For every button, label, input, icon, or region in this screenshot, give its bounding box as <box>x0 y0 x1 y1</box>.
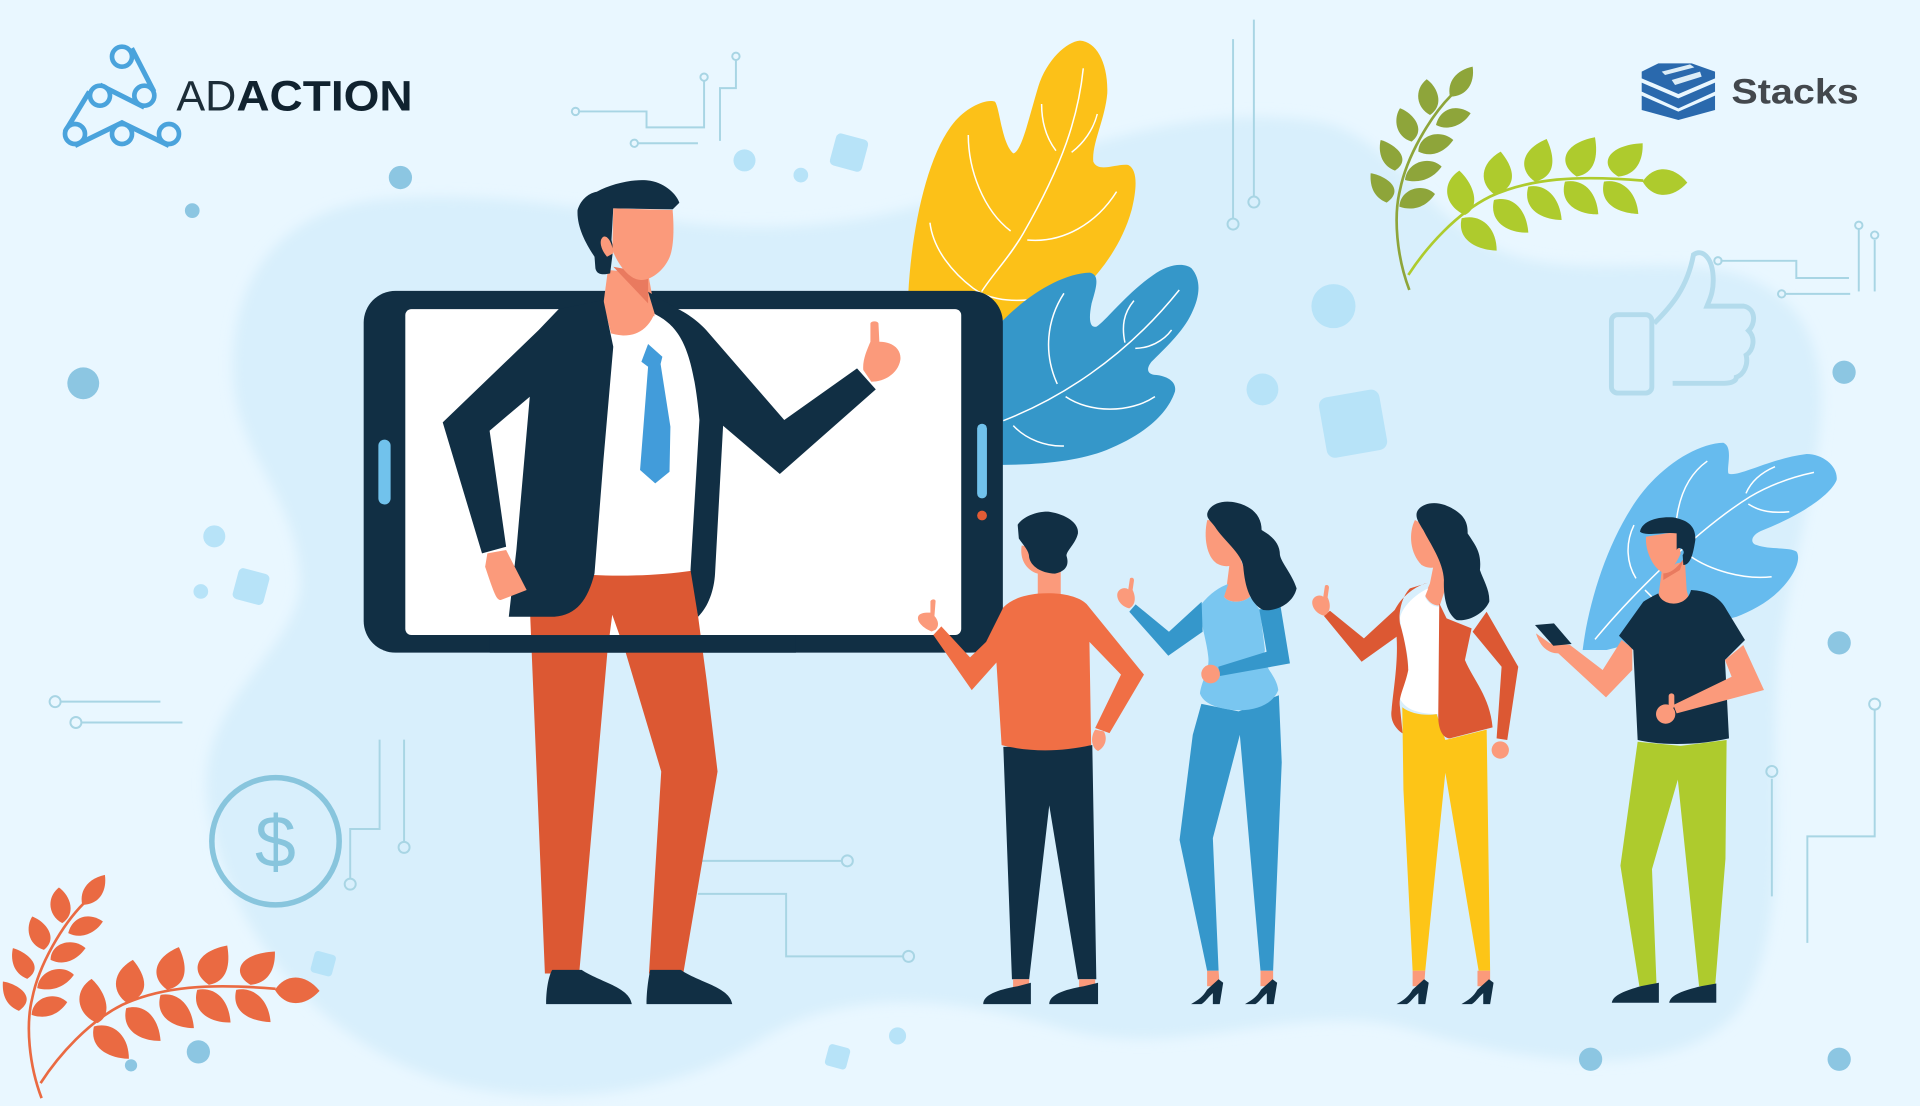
hair <box>577 180 679 274</box>
trousers and shoes <box>1612 740 1727 1003</box>
trousers and shoes <box>1397 707 1494 1004</box>
ear <box>601 236 613 257</box>
leaf: yellow <box>908 41 1136 320</box>
person: man with phone <box>1535 517 1764 1003</box>
tablet left button <box>378 440 391 505</box>
wordmark: AdAction: ACTION <box>236 73 413 120</box>
left hand <box>485 550 527 600</box>
sprig: orange lower <box>41 945 320 1083</box>
icon: thumbs up outline <box>1611 253 1754 393</box>
face <box>612 208 673 280</box>
tablet <box>364 291 1003 653</box>
wordmark: Stacks: Stacks <box>1731 71 1859 111</box>
background blob <box>206 117 1821 1096</box>
icon: Stacks layers <box>1642 63 1715 120</box>
upper body <box>1117 502 1297 710</box>
presenter trousers <box>530 569 718 974</box>
icon: AdAction network <box>65 47 179 146</box>
jacket left <box>443 300 613 617</box>
tie <box>640 344 670 483</box>
icon: dollar coin <box>212 778 339 905</box>
upper body <box>1535 517 1764 744</box>
presenter <box>443 180 900 1004</box>
jacket right <box>648 292 876 617</box>
logo: Stacks <box>1642 63 1859 120</box>
sprig: olive green <box>1371 67 1473 290</box>
audience <box>918 502 1764 1004</box>
person: woman in blue <box>1117 502 1297 1004</box>
person: man in orange sweater <box>918 512 1144 1004</box>
person: woman in red jacket <box>1312 503 1518 1004</box>
right hand <box>863 321 900 382</box>
tablet red light <box>977 511 987 520</box>
presenter upper body <box>443 180 900 617</box>
tablet frame <box>364 291 1003 653</box>
sprig: orange upper <box>3 875 105 1098</box>
leaf: light blue <box>1583 443 1837 650</box>
leaf: blue <box>990 265 1198 465</box>
shirt <box>594 316 699 576</box>
presenter shoes <box>546 970 732 1004</box>
logo: AdAction <box>65 47 413 146</box>
tablet right button <box>977 424 987 498</box>
sprig: lime green <box>1408 137 1687 275</box>
decorative dots <box>67 132 1856 1071</box>
icon: dollar coin: $ <box>255 800 296 883</box>
wordmark: AdAction: AD <box>176 73 236 120</box>
tablet screen <box>405 309 961 635</box>
neck <box>603 270 655 336</box>
upper body <box>1312 503 1518 759</box>
trousers and shoes <box>1180 695 1282 1004</box>
tablet bottom bar over legs <box>490 635 796 653</box>
